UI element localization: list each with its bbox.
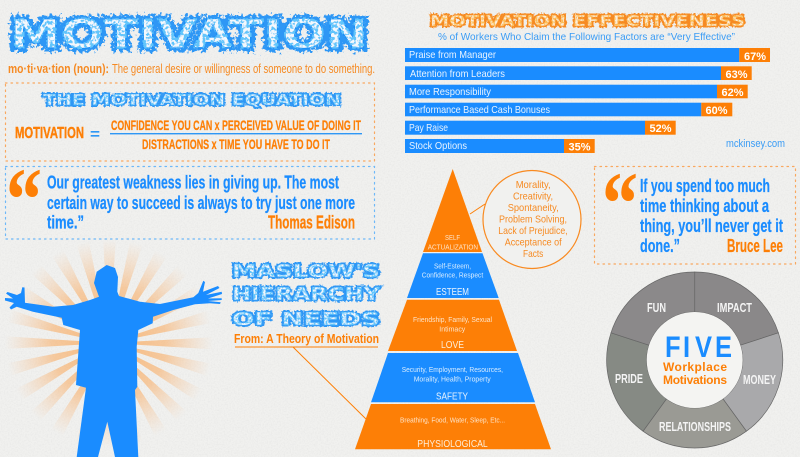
equation heading: THE MOTIVATION EQUATION [43, 91, 341, 109]
icon: person with raised arms [5, 265, 222, 457]
segment: fun [611, 272, 695, 345]
heading: Maslow's hierarchy of needs: MASLOW'S [232, 261, 380, 282]
subheading: source: From: A Theory of Motivation [234, 331, 379, 346]
callout: self actualization traits [470, 170, 581, 268]
segment: fun: FUN [647, 301, 666, 315]
tier: self actualization [423, 169, 482, 252]
segment: impact [695, 272, 778, 345]
bar: more responsibility 62% [405, 85, 748, 99]
bar: attention from leaders 63%: 63% [726, 69, 748, 81]
denominator: DISTRACTIONS x TIME YOU HAVE TO DO IT [142, 137, 330, 152]
segment: money [723, 333, 783, 431]
bar: stock options 35% [405, 139, 595, 154]
equals sign: = [90, 126, 100, 143]
bar: attention from leaders 63% [405, 66, 752, 81]
title: MOTIVATION [10, 12, 368, 58]
segment: money: MONEY [743, 373, 776, 387]
tier: physiological [355, 404, 551, 450]
quote author: Thomas Edison [268, 212, 355, 232]
bar: praise from manager 67%: Praise from Manager [409, 49, 496, 61]
tier: safety: Security, Employment, Resources, [402, 367, 503, 374]
icon: quote mark: “ [602, 153, 638, 253]
tier: safety: Morality, Health, Property [414, 376, 491, 383]
bar: stock options 35%: Stock Options [409, 140, 467, 152]
tier: love: Intimacy [439, 326, 466, 333]
heading: Maslow's hierarchy of needs: HIERARCHY [232, 284, 381, 305]
bar: performance based cash bonuses 60%: Performance Based Cash Bonuses [409, 104, 550, 116]
chart: five workplace motivations wheel [607, 272, 783, 448]
tier: love: LOVE [441, 340, 464, 351]
equation heading: THE MOTIVATION EQUATION [43, 91, 341, 109]
callout: self actualization traits: Creativity, [513, 190, 553, 202]
source connector line [235, 347, 378, 419]
wheel centre [647, 312, 743, 408]
tier: self actualization: ACTUALIZATION [428, 242, 478, 252]
tier: love [388, 300, 517, 351]
tier: love: Friendship, Family, Sexual [413, 317, 492, 324]
bar: more responsibility 62%: 62% [722, 87, 744, 99]
tier: physiological: Breathing, Food, Water, Sleep, Etc... [400, 418, 505, 425]
quote text: time.” [47, 212, 84, 232]
bar: stock options 35%: 35% [568, 142, 591, 154]
tier: physiological: PHYSIOLOGICAL [417, 439, 488, 450]
wheel centre: Motivations [663, 373, 727, 387]
bar: performance based cash bonuses 60%: 60% [706, 105, 728, 117]
tier: self actualization: SELF [445, 233, 460, 242]
heading: motivation effectiveness: MOTIVATION EFFECTIVENESS [430, 12, 745, 30]
segment: relationships: RELATIONSHIPS [659, 420, 731, 434]
heading: Maslow's hierarchy of needs: MASLOW'S [232, 261, 380, 282]
segment: pride: PRIDE [615, 372, 643, 386]
heading: Maslow's hierarchy of needs [232, 261, 381, 330]
bar: praise from manager 67% [405, 48, 770, 63]
callout: self actualization traits: Acceptance of [505, 236, 562, 248]
bar: performance based cash bonuses 60% [405, 103, 732, 117]
callout: self actualization traits: Facts [523, 248, 543, 260]
quote text: Our greatest weakness lies in giving up. The most [47, 172, 339, 192]
bar: pay raise 52%: 52% [650, 123, 672, 135]
icon: quote mark: “ [6, 149, 42, 249]
heading: motivation effectiveness: MOTIVATION EFFECTIVENESS [430, 12, 745, 30]
callout: self actualization traits: Problem Solving, [499, 214, 567, 226]
definition: mo·ti·va·tion (noun): [8, 61, 109, 76]
definition: The general desire or willingness of someone to do something. [112, 61, 375, 76]
callout: self actualization traits: Lack of Prejudice, [498, 225, 568, 237]
heading: Maslow's hierarchy of needs: OF NEEDS [232, 309, 380, 330]
quote text: done.” [640, 235, 680, 256]
tier: esteem: Confidence, Respect [422, 273, 483, 280]
bar: pay raise 52% [405, 121, 676, 135]
wheel centre: Workplace [663, 360, 727, 374]
numerator: CONFIDENCE YOU CAN x PERCEIVED VALUE OF DOING IT [111, 118, 361, 133]
heading: Maslow's hierarchy of needs: HIERARCHY [232, 284, 381, 305]
title: MOTIVATION [10, 12, 368, 58]
panel: Bruce Lee quote [594, 153, 796, 264]
tier: esteem [407, 253, 499, 298]
bar: praise from manager 67%: 67% [744, 51, 766, 63]
segment: relationships [643, 399, 746, 448]
tier: esteem: ESTEEM [436, 287, 469, 298]
icon: sun rays [57, 291, 161, 395]
source: mckinsey.com: mckinsey.com [726, 138, 785, 150]
tier: esteem: Self-Esteem, [434, 264, 471, 271]
quote text: certain way to succeed is always to try just one more [47, 192, 355, 213]
segment: pride [607, 333, 666, 431]
panel: Thomas Edison quote [6, 149, 374, 249]
equation left side: MOTIVATION [15, 125, 84, 142]
heading: Maslow's hierarchy of needs: OF NEEDS [232, 309, 380, 330]
segment: impact: IMPACT [717, 301, 752, 315]
tier: safety: SAFETY [436, 391, 468, 402]
bar chart: motivation factors [405, 48, 770, 154]
bar: more responsibility 62%: More Responsibility [409, 86, 492, 98]
bar: attention from leaders 63%: Attention from Leaders [410, 68, 505, 80]
tier: safety [371, 353, 535, 402]
subheading: % of Workers Who Claim the Following Factors are “Very Effective” [438, 31, 735, 43]
callout: self actualization traits: Spontaneity, [508, 202, 559, 214]
wheel centre: FIVE [665, 330, 732, 363]
panel: motivation equation [6, 83, 374, 161]
callout: self actualization traits: Morality, [516, 179, 551, 191]
chart: Maslow pyramid [355, 169, 551, 450]
fraction bar [110, 133, 362, 134]
bar: pay raise 52%: Pay Raise [409, 122, 448, 134]
